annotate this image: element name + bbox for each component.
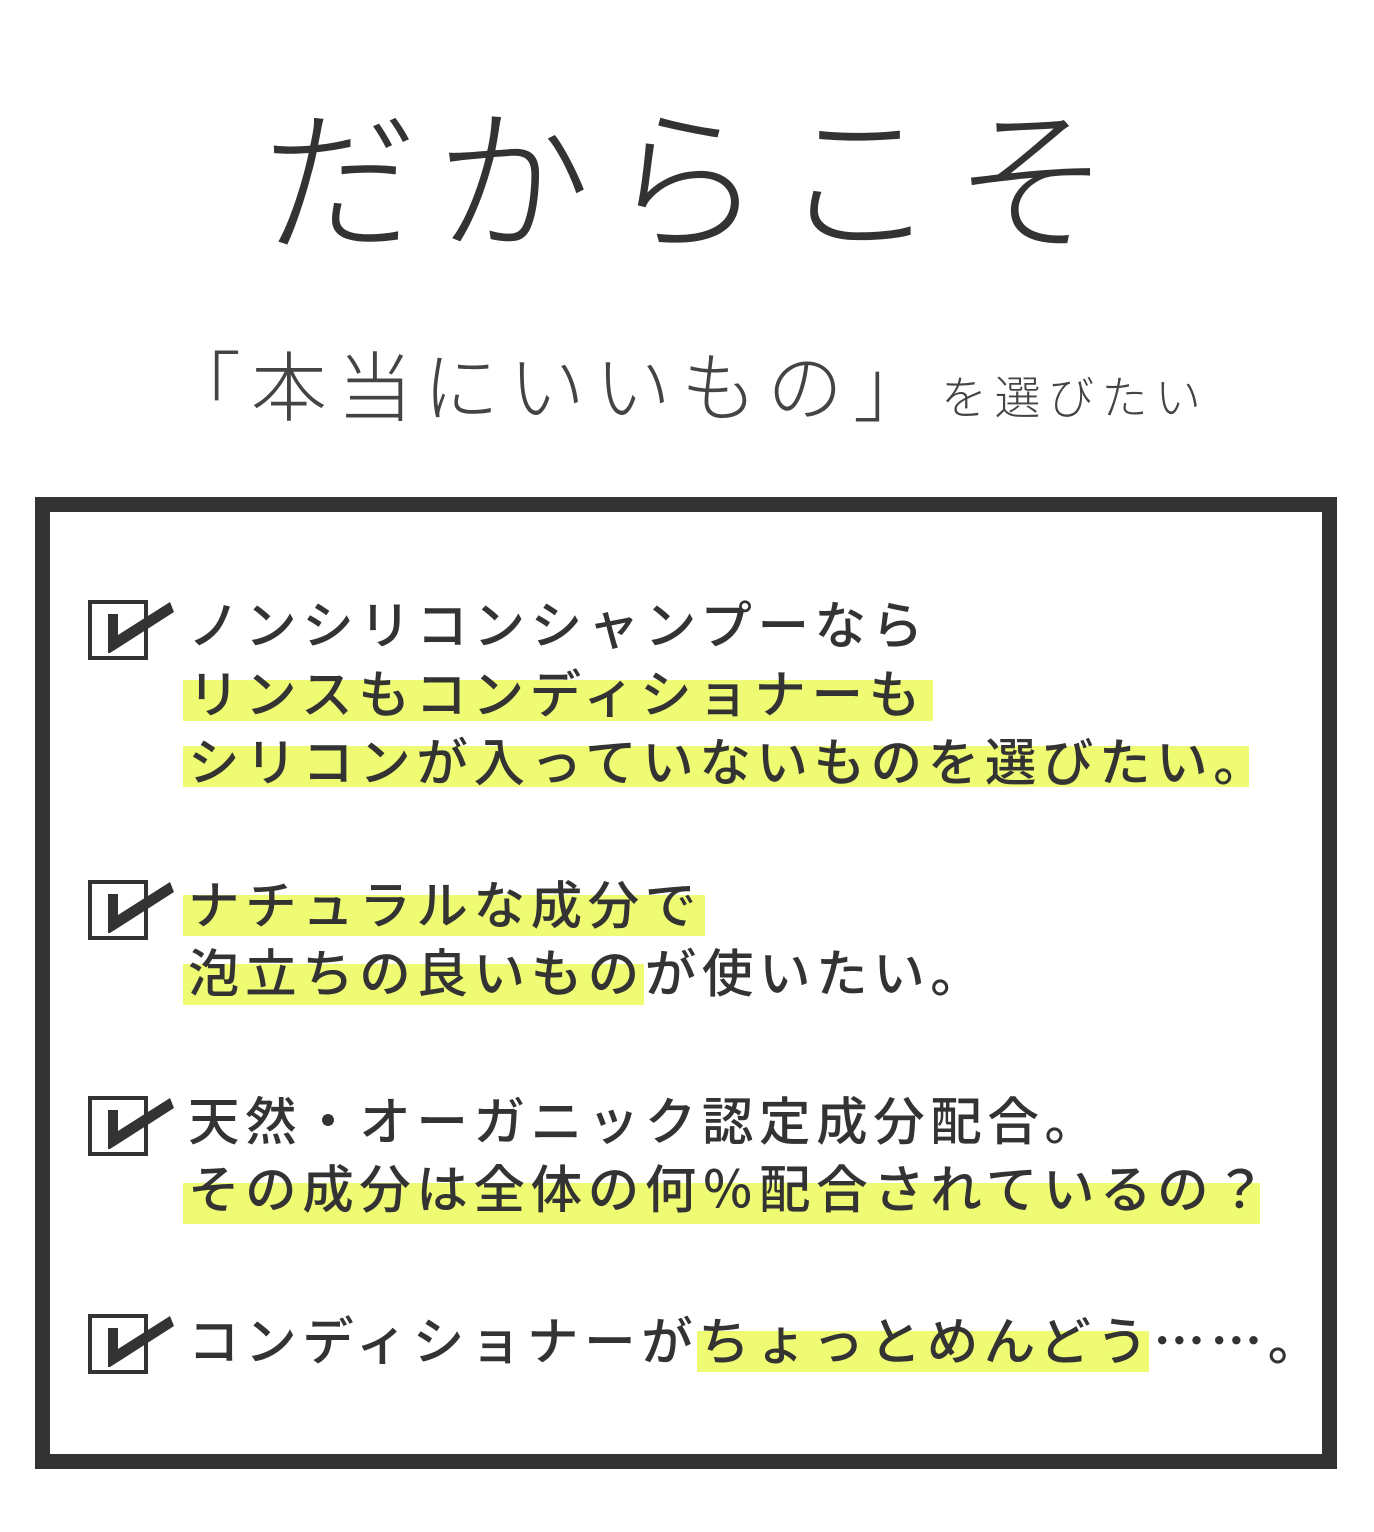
highlight (183, 746, 1249, 787)
text line: シリコンが入っていないものを選びたい。 (188, 734, 1270, 792)
text line: コンディショナーがちょっとめんどう……。 (188, 1300, 1325, 1375)
highlight (183, 895, 705, 936)
title: だからこそ (262, 57, 1127, 283)
icon: checkbox 1 (88, 600, 174, 660)
icon: checkbox 4 (88, 1314, 174, 1374)
panel: checklist (35, 497, 1337, 1469)
text line: 泡立ちの良いものが使いたい。 (188, 945, 987, 1003)
text line: 天然・オーガニック認定成分配合。 (188, 1093, 1102, 1151)
text line: ノンシリコンシャンプーなら (188, 597, 929, 655)
highlight (697, 1331, 1149, 1372)
text line: リンスもコンディショナーも (188, 666, 926, 724)
text line: ナチュラルな成分で (188, 877, 702, 935)
highlight (183, 964, 644, 1005)
subtitle: 「本当にいいもの」を選びたい (165, 327, 1208, 437)
text line: その成分は全体の何％配合されているの？ (188, 1161, 1271, 1219)
icon: checkbox 3 (88, 1096, 174, 1156)
highlight (183, 680, 933, 721)
highlight (183, 1183, 1260, 1224)
icon: checkbox 2 (88, 880, 174, 940)
